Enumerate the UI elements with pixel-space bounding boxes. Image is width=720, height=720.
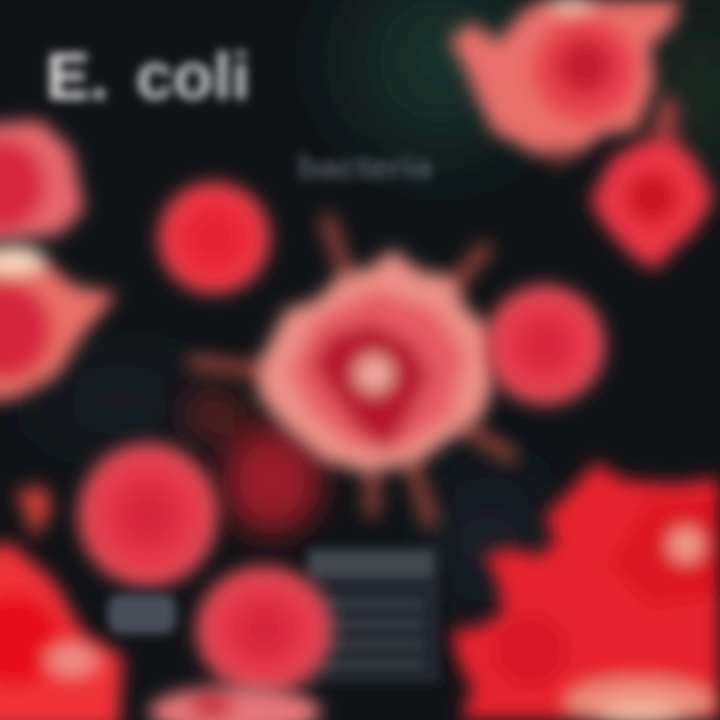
- bacterium: right: [590, 95, 714, 270]
- body: [258, 249, 493, 473]
- bacterium: left top edge: [0, 120, 84, 243]
- bacterium: right of centre: [485, 285, 605, 405]
- bacterium: bottom: [149, 686, 321, 720]
- bacterium: left middle edge: [0, 244, 117, 400]
- text panel: lower centre: [306, 546, 440, 684]
- bacterium: bottom centre: [196, 566, 332, 694]
- bacterium cluster: bottom right: [452, 462, 720, 720]
- small grey label: [108, 594, 176, 634]
- bacterium: top right large: [449, 0, 682, 170]
- bacterium: central large: [195, 222, 510, 520]
- subtitle label: bacteria: [298, 149, 432, 185]
- title: E. coli: coli: [136, 39, 250, 113]
- bacterium: small round centre-left: [158, 182, 270, 294]
- bacterium: lower left: [16, 443, 218, 587]
- title: E. coli: E.: [46, 39, 108, 113]
- spikes: [195, 222, 510, 520]
- bacterium: dark behind centre: [183, 385, 328, 542]
- title: E. coli: [46, 39, 250, 113]
- bacterium: bottom left corner: [0, 542, 123, 720]
